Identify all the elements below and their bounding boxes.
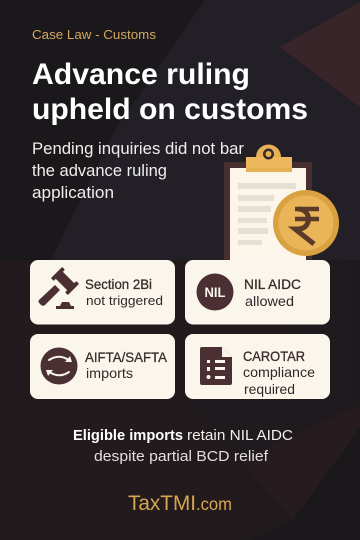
title	[32, 58, 308, 126]
subtitle	[32, 139, 244, 202]
card: Section 2Bi	[30, 260, 175, 324]
label: AIFTA/SAFTA	[85, 349, 168, 365]
icon: checklist document	[200, 347, 232, 385]
brand	[128, 492, 232, 515]
label	[85, 349, 168, 381]
icon: clipboard with rupee coin	[224, 144, 339, 262]
conclusion text: Eligible imports	[73, 428, 183, 444]
subtitle: Pending inquiries did not bar	[32, 139, 244, 158]
label: not triggered	[86, 293, 163, 308]
label: compliance	[243, 364, 315, 380]
label: allowed	[245, 293, 294, 309]
title: upheld on customs	[32, 93, 308, 126]
label	[244, 276, 301, 309]
subtitle: the advance ruling	[32, 161, 167, 180]
icon: NIL badge	[196, 274, 234, 310]
conclusion text: despite partial BCD relief	[94, 449, 269, 465]
label: CAROTAR	[243, 348, 305, 364]
card: CAROTAR	[185, 334, 330, 399]
card: AIFTA/SAFTA	[30, 334, 175, 399]
card: NIL AIDC	[185, 260, 330, 324]
brand: .com	[196, 494, 232, 514]
icon: NIL badge: NIL	[204, 285, 226, 300]
brand: TaxTMI	[128, 492, 196, 515]
title: Advance ruling	[32, 58, 250, 91]
conclusion text	[73, 428, 293, 465]
conclusion text: retain NIL AIDC	[187, 428, 293, 444]
label: Section 2Bi	[85, 276, 152, 292]
subtitle: application	[32, 183, 114, 202]
eyebrow: Case Law - Customs	[32, 28, 156, 42]
label	[85, 276, 163, 308]
label	[243, 348, 315, 397]
label: NIL AIDC	[244, 276, 301, 292]
label: imports	[86, 365, 133, 381]
label: required	[244, 381, 295, 397]
icon: exchange arrows	[40, 348, 78, 384]
icon: gavel	[38, 267, 79, 309]
